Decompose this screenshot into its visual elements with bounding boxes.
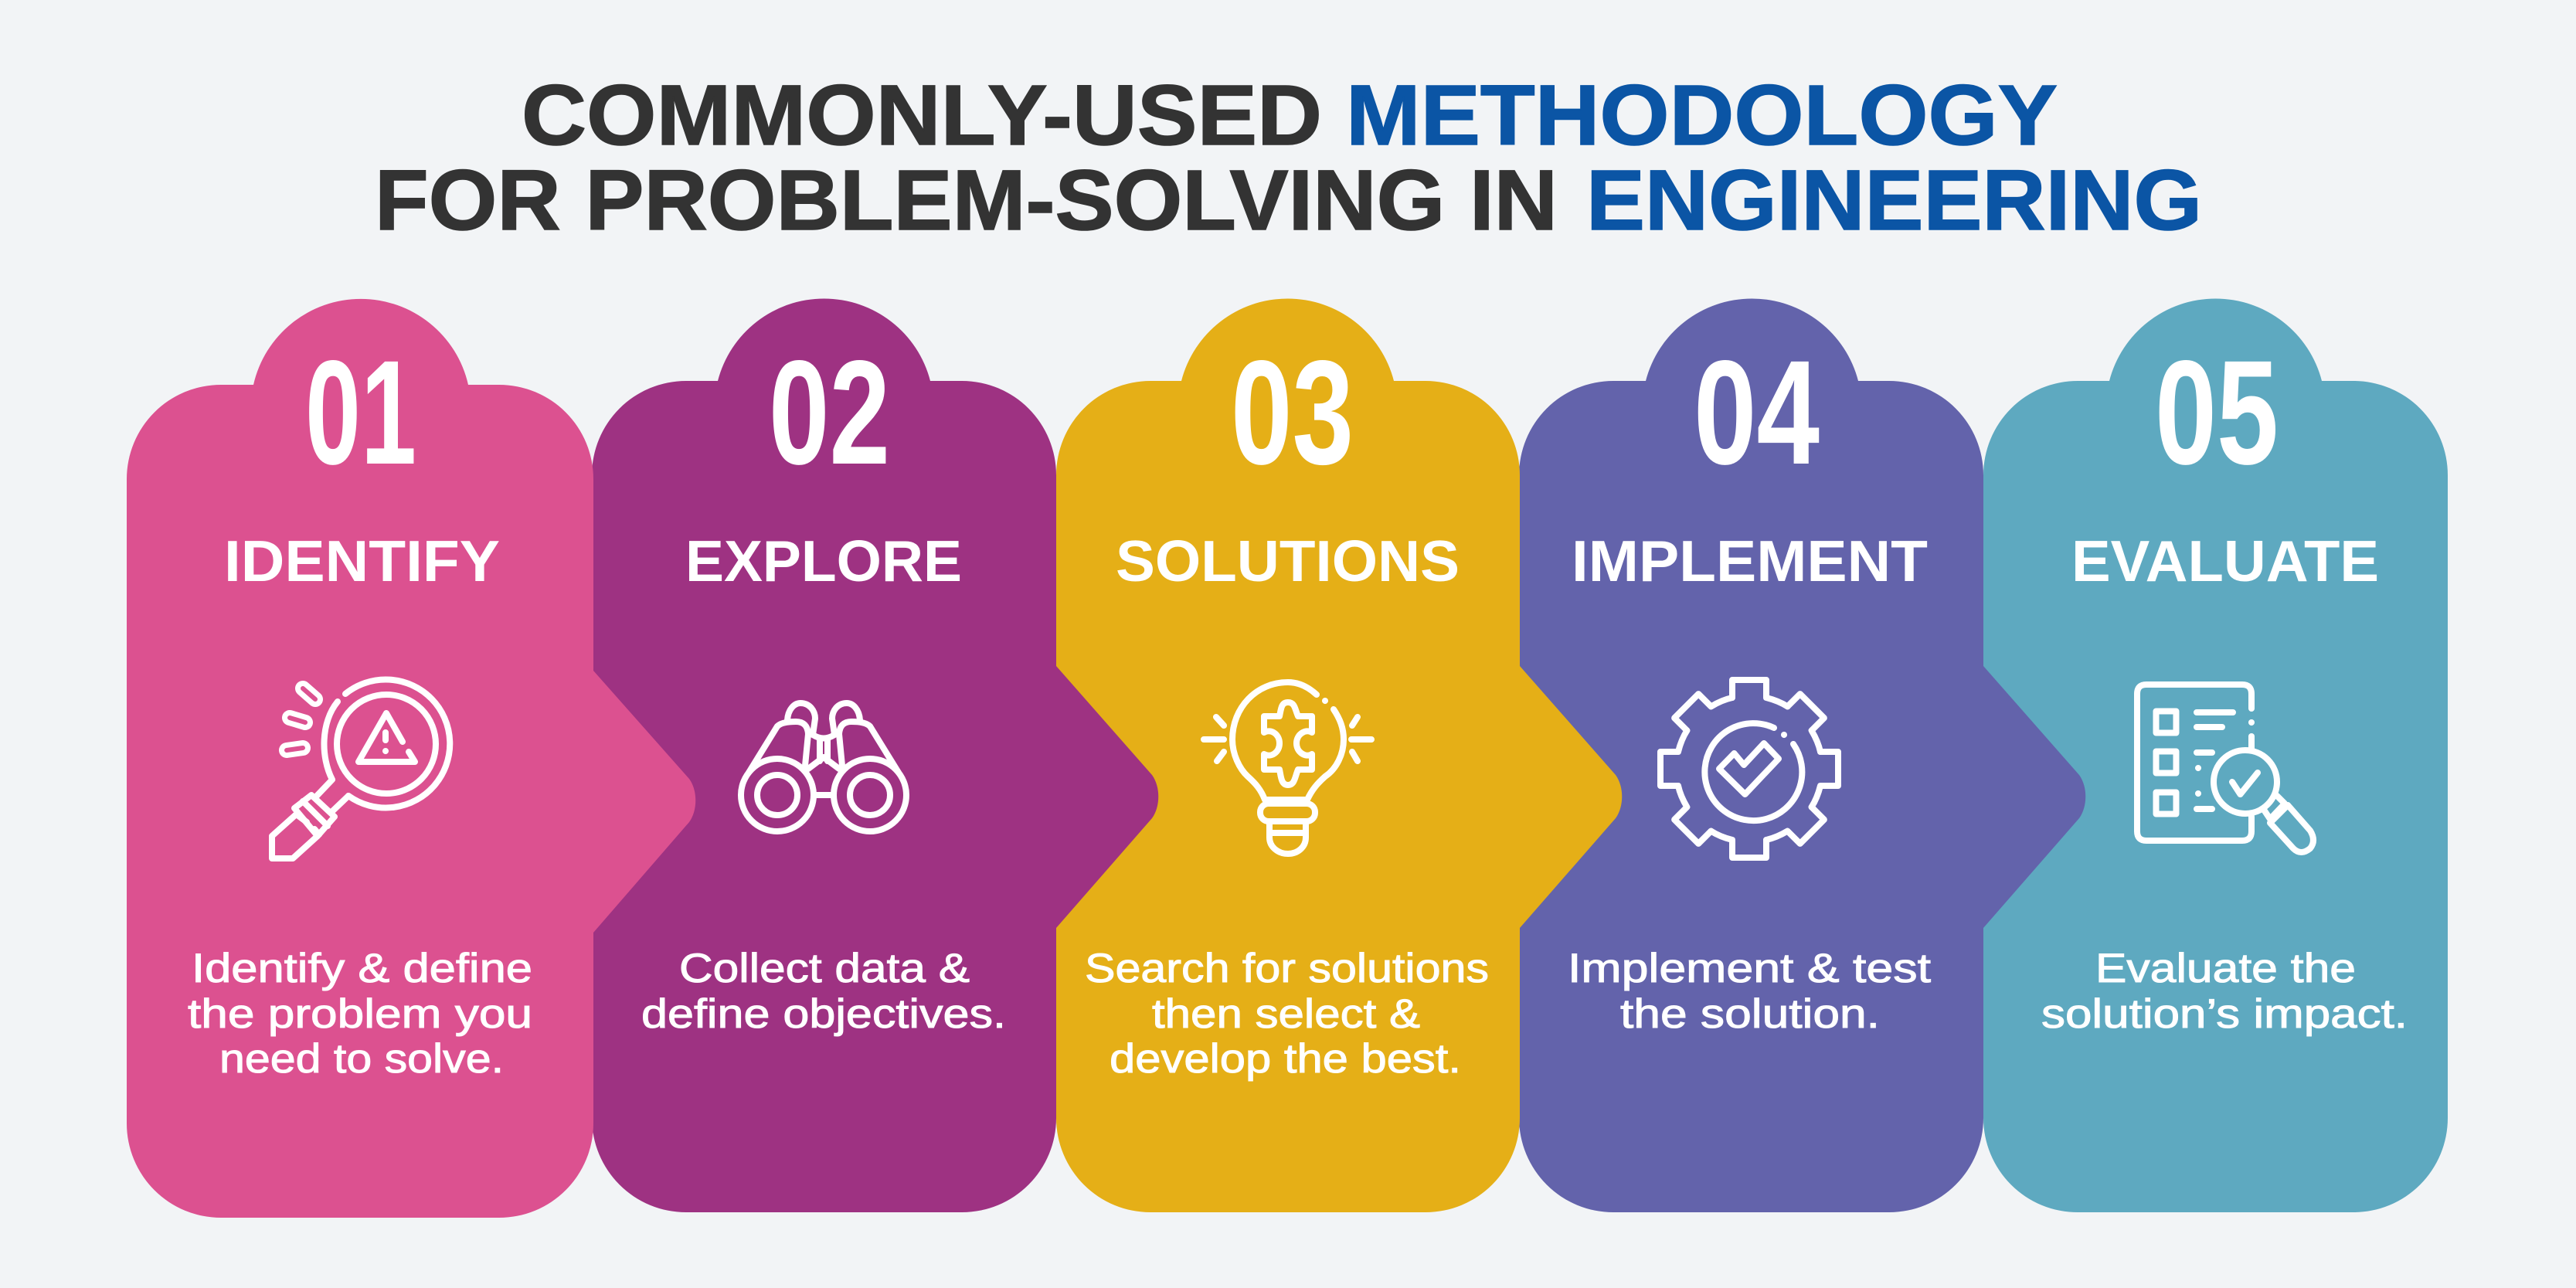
icon: magnifier with warning triangle: [272, 679, 450, 858]
number 04: 04: [1694, 329, 1820, 495]
description identify: Identify & define: [192, 946, 532, 991]
panel: 01 identify: [127, 299, 695, 1218]
icon: binoculars: [741, 703, 906, 831]
heading identify: IDENTIFY: [224, 528, 500, 593]
number 02: 02: [769, 329, 890, 495]
description implement: [1568, 946, 1931, 1037]
icon: gear with check: [1660, 679, 1839, 858]
icon: checklist with magnifier: [2137, 685, 2313, 852]
description evaluate: [2041, 946, 2408, 1037]
description solutions: [1085, 946, 1489, 1082]
title: ENGINEERING: [1586, 153, 2202, 248]
panel: 02 explore: [592, 298, 1158, 1212]
title: COMMONLY-USED: [522, 68, 1322, 163]
description explore: Collect data &: [679, 946, 970, 991]
description solutions: Search for solutions: [1085, 946, 1489, 991]
description identify: need to solve.: [219, 1036, 504, 1082]
description implement: Implement & test: [1568, 946, 1931, 991]
number 01: 01: [305, 329, 416, 495]
description identify: the problem you: [188, 991, 532, 1037]
icon: light bulb with puzzle piece: [1204, 682, 1371, 854]
title: METHODOLOGY: [1346, 68, 2058, 163]
heading explore: EXPLORE: [685, 528, 962, 593]
panel: 05 evaluate: [1983, 298, 2448, 1212]
number 03: 03: [1231, 329, 1354, 495]
description solutions: develop the best.: [1110, 1036, 1461, 1082]
description implement: the solution.: [1620, 991, 1880, 1037]
heading solutions: SOLUTIONS: [1116, 528, 1460, 593]
description explore: [641, 946, 1006, 1037]
description identify: [188, 946, 532, 1082]
title: [375, 68, 2202, 248]
description explore: define objectives.: [641, 991, 1006, 1037]
title: FOR PROBLEM-SOLVING IN: [375, 153, 1558, 248]
heading implement: IMPLEMENT: [1572, 528, 1928, 593]
number 05: 05: [2155, 329, 2279, 495]
panel: 04 implement: [1519, 298, 2085, 1212]
heading evaluate: EVALUATE: [2071, 528, 2379, 593]
description evaluate: Evaluate the: [2095, 946, 2356, 991]
description solutions: then select &: [1152, 991, 1420, 1037]
panel: 03 solutions: [1056, 298, 1622, 1212]
description evaluate: solution’s impact.: [2041, 991, 2408, 1037]
